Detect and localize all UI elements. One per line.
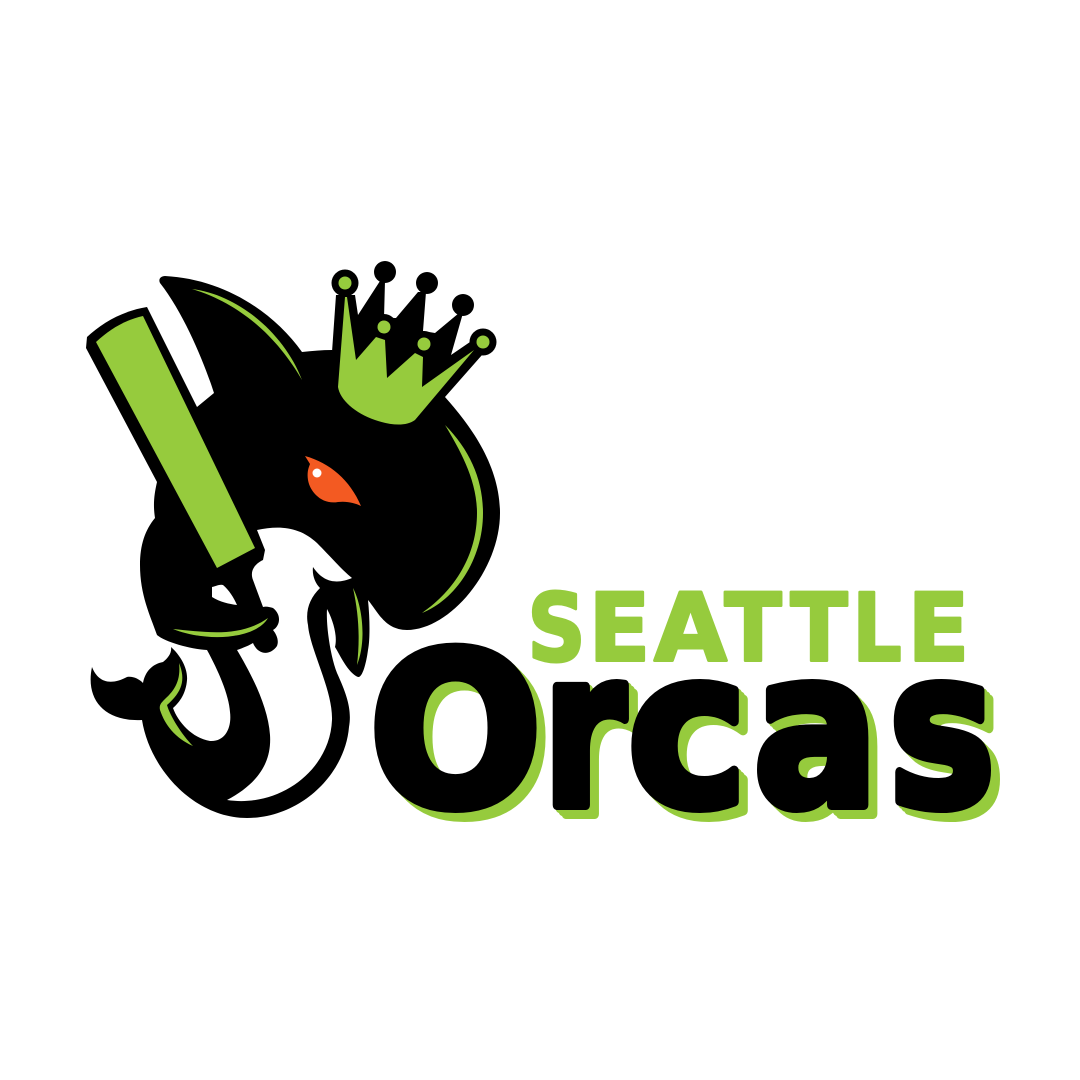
wordmark: SEATTLE: T	[724, 573, 782, 683]
green shoulder stripe	[96, 316, 255, 568]
wordmark: SEATTLE: T	[790, 573, 848, 683]
icon: orange eye	[305, 456, 361, 506]
wordmark: SEATTLE: L	[852, 574, 902, 683]
wordmark: Orcas: c	[627, 605, 748, 857]
crown green band	[338, 297, 474, 425]
green head highlight	[422, 425, 483, 613]
wordmark: Orcas: s	[889, 605, 995, 856]
crown balls	[332, 261, 496, 357]
wordmark: Orcas	[369, 604, 995, 857]
orca mascot	[86, 261, 500, 818]
white belly	[227, 528, 352, 801]
wordmark: SEATTLE: A	[654, 574, 727, 684]
crown green jewels	[338, 276, 490, 350]
wordmark: SEATTLE: S	[527, 574, 586, 683]
wordmark: Orcas: r	[542, 604, 626, 856]
wordmark: SEATTLE	[527, 573, 969, 684]
green fin highlight	[192, 289, 302, 380]
icon: crown	[332, 261, 496, 430]
green tail highlight	[160, 663, 193, 746]
orca body silhouette	[86, 276, 500, 818]
crown black outline	[332, 281, 482, 430]
wordmark: SEATTLE: E	[908, 573, 969, 683]
wordmark: Orcas: a	[753, 604, 879, 856]
wordmark: Orcas: O	[369, 609, 542, 856]
white eye patch	[212, 585, 237, 605]
wordmark: SEATTLE: E	[589, 573, 650, 683]
green collar highlight	[173, 618, 268, 637]
green flipper highlight	[353, 588, 363, 665]
